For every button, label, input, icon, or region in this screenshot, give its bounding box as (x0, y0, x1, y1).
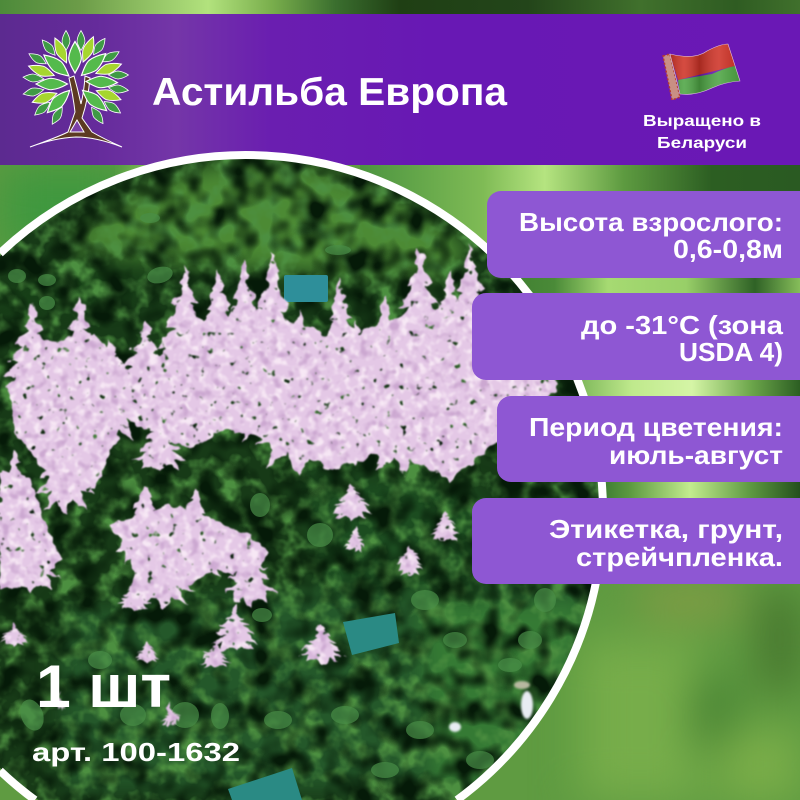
icon: flag of Belarus (663, 44, 740, 100)
header banner (0, 14, 800, 165)
info panel: height: Высота взрослого: (519, 207, 783, 237)
article number: арт. 100-1632 (32, 737, 240, 767)
grown in Belarus caption: Выращено в (643, 113, 761, 130)
info panel: frost hardiness: до -31°C (зона (581, 310, 784, 340)
info panel: package contents (472, 498, 800, 584)
info panel: frost hardiness (472, 293, 800, 380)
lower left mass (0, 470, 60, 590)
info panel: height (487, 191, 800, 278)
lower middle cluster (110, 505, 270, 600)
small plumes (211, 606, 259, 653)
tree trunk (30, 76, 122, 147)
top background band (0, 0, 800, 15)
circle white border (0, 155, 603, 800)
info panel: flowering period: июль-август (609, 440, 783, 470)
upper foliage (0, 160, 590, 790)
grown in Belarus caption: Беларуси (657, 135, 747, 152)
grown in Belarus caption (643, 113, 761, 152)
photo: astilbe bush in circle (0, 150, 620, 800)
info panel: flowering period (497, 396, 800, 482)
foliage leaves (8, 213, 556, 778)
logo: tree (22, 31, 129, 147)
info panel: package contents: Этикетка, грунт, (549, 514, 783, 544)
info panel: flowering period: Период цветения: (529, 412, 783, 442)
info panel: package contents: стрейчпленка. (576, 542, 783, 572)
left mass (8, 335, 130, 490)
central arch mass (130, 310, 560, 480)
info panel: frost hardiness: USDA 4) (679, 337, 783, 367)
white flowers (449, 681, 533, 732)
title: Астильба Европа (152, 71, 507, 114)
info panel: height: 0,6-0,8м (673, 234, 783, 264)
quantity: 1 шт (36, 653, 171, 720)
teal plant labels (228, 275, 399, 800)
pink astilbe plumes (0, 245, 560, 725)
